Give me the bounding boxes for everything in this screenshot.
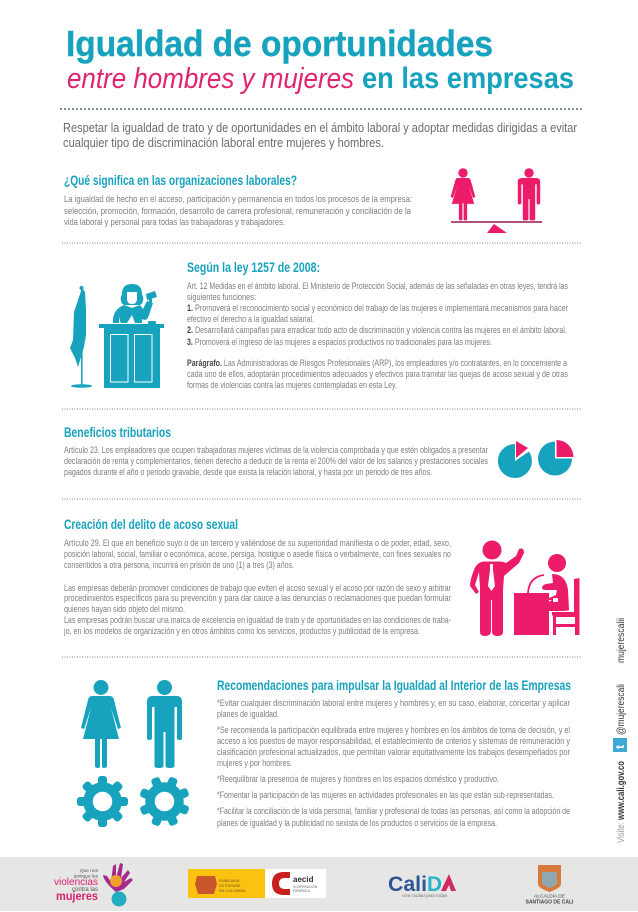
logo: embajada de España: EMBAJADA bbox=[219, 879, 240, 883]
text block: recommendations: planes de igualdad y la publicidad no sexista de los productos o servicios de la empresa. bbox=[217, 818, 497, 829]
text block: recommendations: *Reequilibrar la presencia de mujeres y hombres en los espacios doméstico y productivo. bbox=[217, 774, 499, 785]
heading: tax benefits: Beneficios tributarios bbox=[64, 424, 171, 440]
panel: sexual harassment offence bbox=[63, 516, 579, 637]
title bbox=[66, 23, 574, 95]
text block: law 1257: formas de violencias contra las mujeres contempladas en esta Ley. bbox=[187, 380, 397, 391]
title: entre hombres y mujeres bbox=[67, 63, 354, 95]
logo: Alcaldía de Santiago de Cali: SANTIAGO DE CALI bbox=[526, 900, 574, 906]
title: en las empresas bbox=[362, 62, 574, 95]
icon: man and seated woman at desk bbox=[470, 540, 580, 636]
text block: sexual harassment offence: consentidos a otra persona, incurrirá en prisión de uno (1) a tres (3) años. bbox=[64, 560, 294, 571]
text block: recommendations bbox=[217, 698, 571, 829]
logo: embajada de España: DE ESPAÑA bbox=[219, 883, 241, 888]
icon: judge with flag bbox=[70, 284, 164, 388]
intro text: cualquier tipo de discriminación laboral entre mujeres y hombres. bbox=[63, 135, 384, 150]
logo: CaliDA: Una ciudad para todas bbox=[402, 893, 448, 898]
text block: sexual harassment offence: Las empresas deberán promover condiciones de trabajo que eviten el acoso sexual y el acoso por razón de sexo y arbitrar bbox=[64, 583, 452, 594]
logo: CaliDA: Cali bbox=[388, 873, 427, 896]
panel: recommendations bbox=[77, 677, 571, 829]
logo: aecid: COOPERACIÓN bbox=[293, 884, 318, 889]
logo: aecid: aecid bbox=[293, 875, 314, 884]
icon: balance with woman and man bbox=[451, 168, 542, 233]
text block: law 1257: 3. Promoverá el ingreso de las mujeres a espacios productivos no tradicionales para las mujeres. bbox=[187, 337, 492, 348]
intro text bbox=[63, 120, 578, 150]
sidebar: website and social media: mujerescalii bbox=[615, 618, 627, 663]
logo: aecid: ESPAÑOLA bbox=[293, 888, 311, 893]
text block: meaning bbox=[64, 194, 412, 228]
footer band bbox=[0, 857, 638, 911]
logo: violencias contra las mujeres: contra las bbox=[72, 887, 98, 893]
text block: sexual harassment offence: jo, en los modelos de organización y en otros ámbitos como los servicios, productos y publicidad de la empresa. bbox=[63, 626, 420, 637]
logo: aecid bbox=[265, 869, 326, 898]
sidebar: website and social media: @mujerescali bbox=[615, 684, 627, 735]
text block: sexual harassment offence bbox=[63, 538, 452, 637]
text block: sexual harassment offence: posición laboral, social, familiar o económica, acose, persiga, hostigue o asedie física o verbalmente, con fines sexuales no bbox=[64, 549, 451, 560]
logo: violencias contra las mujeres: violencias bbox=[54, 877, 98, 888]
text block: sexual harassment offence: quienes hayan sido objeto del mismo. bbox=[64, 604, 185, 615]
text block: law 1257: siguientes funciones: bbox=[187, 292, 256, 303]
text block: tax benefits: Artículo 23. Los empleadores que ocupen trabajadoras mujeres víctimas de la violencia comprobada y que estén obligados a presentar bbox=[64, 445, 489, 456]
icon: twitter square: t bbox=[613, 745, 627, 749]
text block: recommendations: planes de igualdad. bbox=[217, 709, 279, 720]
logo: violencias contra las mujeres: Que nos bbox=[80, 868, 99, 874]
icon: woman, man and gears bbox=[77, 680, 190, 827]
chart: two pie charts bbox=[498, 440, 574, 478]
logo: violencias contra las mujeres bbox=[54, 863, 133, 906]
text block: meaning: La igualdad de hecho en el acceso, participación y permanencia en todos los procesos de la empresa: bbox=[64, 194, 412, 205]
heading: meaning: ¿Qué significa en las organizaciones laborales? bbox=[64, 172, 297, 188]
logo: Alcaldía de Santiago de Cali: ALCALDÍA DE bbox=[534, 892, 565, 900]
sidebar: website and social media bbox=[613, 618, 627, 843]
heading: law 1257: Según la ley 1257 de 2008: bbox=[187, 259, 320, 275]
panel: tax benefits bbox=[64, 424, 574, 478]
logo: CaliDA: D bbox=[427, 873, 442, 896]
logo: embajada de España bbox=[188, 869, 265, 898]
text block: tax benefits: declaración de renta y complementarios, tienen derecho a deducir de la renta el 200% del valor de los salarios y prestaciones sociales bbox=[64, 456, 488, 467]
logo: violencias contra las mujeres: mujeres bbox=[56, 889, 98, 903]
text block: tax benefits: pagados durante el año o periodo gravable, desde que exista la relación laboral, y hasta por un periodo de tres años. bbox=[64, 467, 432, 478]
title: Igualdad de oportunidades bbox=[66, 23, 493, 64]
icon: twitter square bbox=[613, 738, 627, 752]
sidebar: website and social media: Visite: www.cali.gov.co bbox=[615, 761, 627, 843]
panel: meaning bbox=[64, 168, 542, 233]
logo: Alcaldía de Santiago de Cali bbox=[526, 865, 574, 906]
logo: embajada de España: EN COLOMBIA bbox=[219, 889, 246, 893]
text block: law 1257: efectivo el derecho a la igualdad salarial. bbox=[187, 314, 314, 325]
text block: meaning: selección, promoción, formación, desarrollo de carrera profesional, remuneración y conciliación de la bbox=[64, 206, 412, 217]
logo: CaliDA bbox=[388, 873, 456, 898]
text block: meaning: vida laboral y personal para todas las trabajadoras y trabajadores. bbox=[64, 217, 285, 228]
panel: law 1257 bbox=[70, 259, 569, 391]
text block: law 1257 bbox=[187, 281, 569, 391]
text block: tax benefits bbox=[64, 445, 489, 478]
text block: sexual harassment offence: Las empresas podrán buscar una marca de excelencia en igualdad de trato y de oportunidades en las condiciones de traba- bbox=[64, 615, 451, 626]
text block: sexual harassment offence: procedimientos específicos para su prevención y para dar cauce a las denuncias o reclamaciones que puedan formular bbox=[64, 593, 452, 604]
text block: recommendations: mujeres y por hombres. bbox=[217, 758, 292, 769]
text block: sexual harassment offence: Artículo 29. El que en beneficio suyo o de un tercero y valiéndose de su superioridad manifiesta o de poder, edad, sexo, bbox=[64, 538, 451, 549]
heading: sexual harassment offence: Creación del delito de acoso sexual bbox=[64, 516, 238, 532]
logo: violencias contra las mujeres: juntique las bbox=[73, 874, 99, 880]
